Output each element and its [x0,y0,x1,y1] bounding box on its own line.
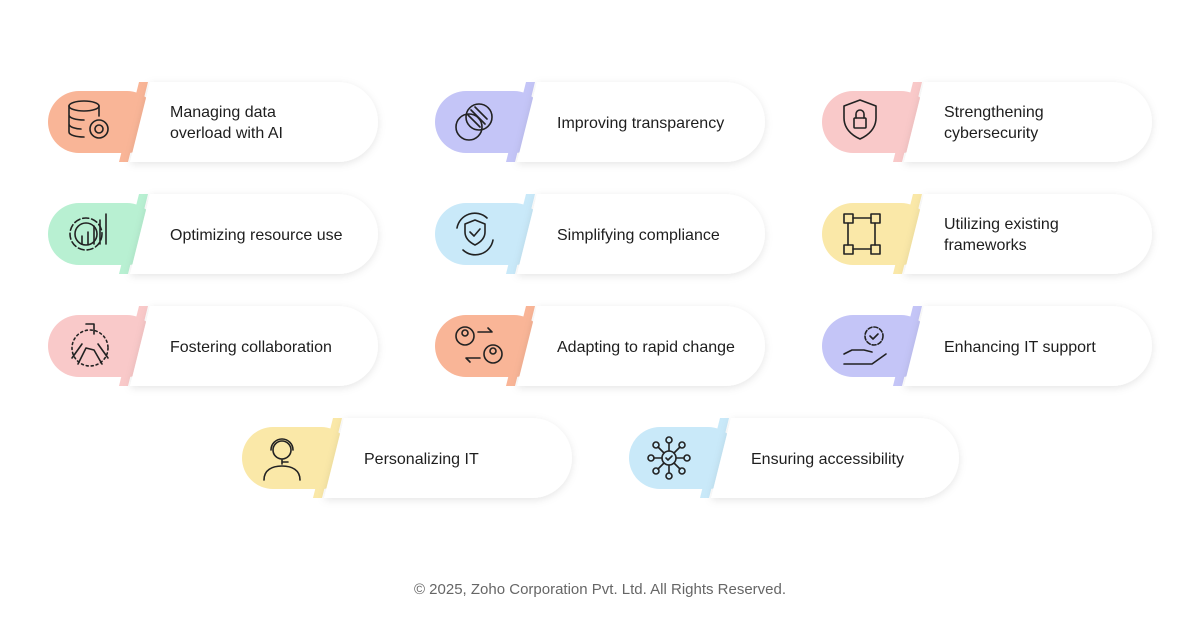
card: Managing data overload with AI [48,82,378,162]
card: Managing data overload with AI: overload with AI [170,125,283,142]
card: Enhancing IT support [822,306,1152,386]
card: Utilizing existing frameworks [822,194,1152,274]
icon: support agent [264,439,300,480]
card: Enhancing IT support: Enhancing IT support [944,339,1096,356]
icon: hands together [72,324,108,366]
icon: network hub [648,437,690,479]
card: Ensuring accessibility [629,418,959,498]
card: Simplifying compliance: Simplifying compliance [557,227,720,244]
icon: database gear [69,101,108,138]
card: Optimizing resource use [48,194,378,274]
icon: shield check cycle [457,213,493,255]
card: Strengthening cybersecurity: Strengthening [944,104,1044,121]
card: Improving transparency [435,82,765,162]
icon: people exchange [456,327,502,363]
icon: shield lock [844,100,876,139]
icon: overlapping circles [456,104,492,140]
card: Strengthening cybersecurity [822,82,1152,162]
card: Adapting to rapid change: Adapting to rapid change [557,339,735,356]
card: Strengthening cybersecurity: cybersecurity [944,125,1038,142]
card: Fostering collaboration [48,306,378,386]
card: Personalizing IT [242,418,572,498]
card: Personalizing IT: Personalizing IT [364,451,479,468]
card: Optimizing resource use: Optimizing resource use [170,227,343,244]
card: Adapting to rapid change [435,306,765,386]
card: Utilizing existing frameworks: frameworks [944,237,1027,254]
footer copyright: © 2025, Zoho Corporation Pvt. Ltd. All Rights Reserved. [414,581,786,598]
icon: gear chart [70,214,106,250]
card: Fostering collaboration: Fostering collaboration [170,339,332,356]
card: Simplifying compliance [435,194,765,274]
card: Utilizing existing frameworks: Utilizing existing [944,216,1059,233]
card: Ensuring accessibility: Ensuring accessibility [751,451,904,468]
icon: hand gear [844,327,886,364]
icon: framework nodes [844,214,880,254]
card: Improving transparency: Improving transparency [557,115,724,132]
card: Managing data overload with AI: Managing data [170,104,276,121]
